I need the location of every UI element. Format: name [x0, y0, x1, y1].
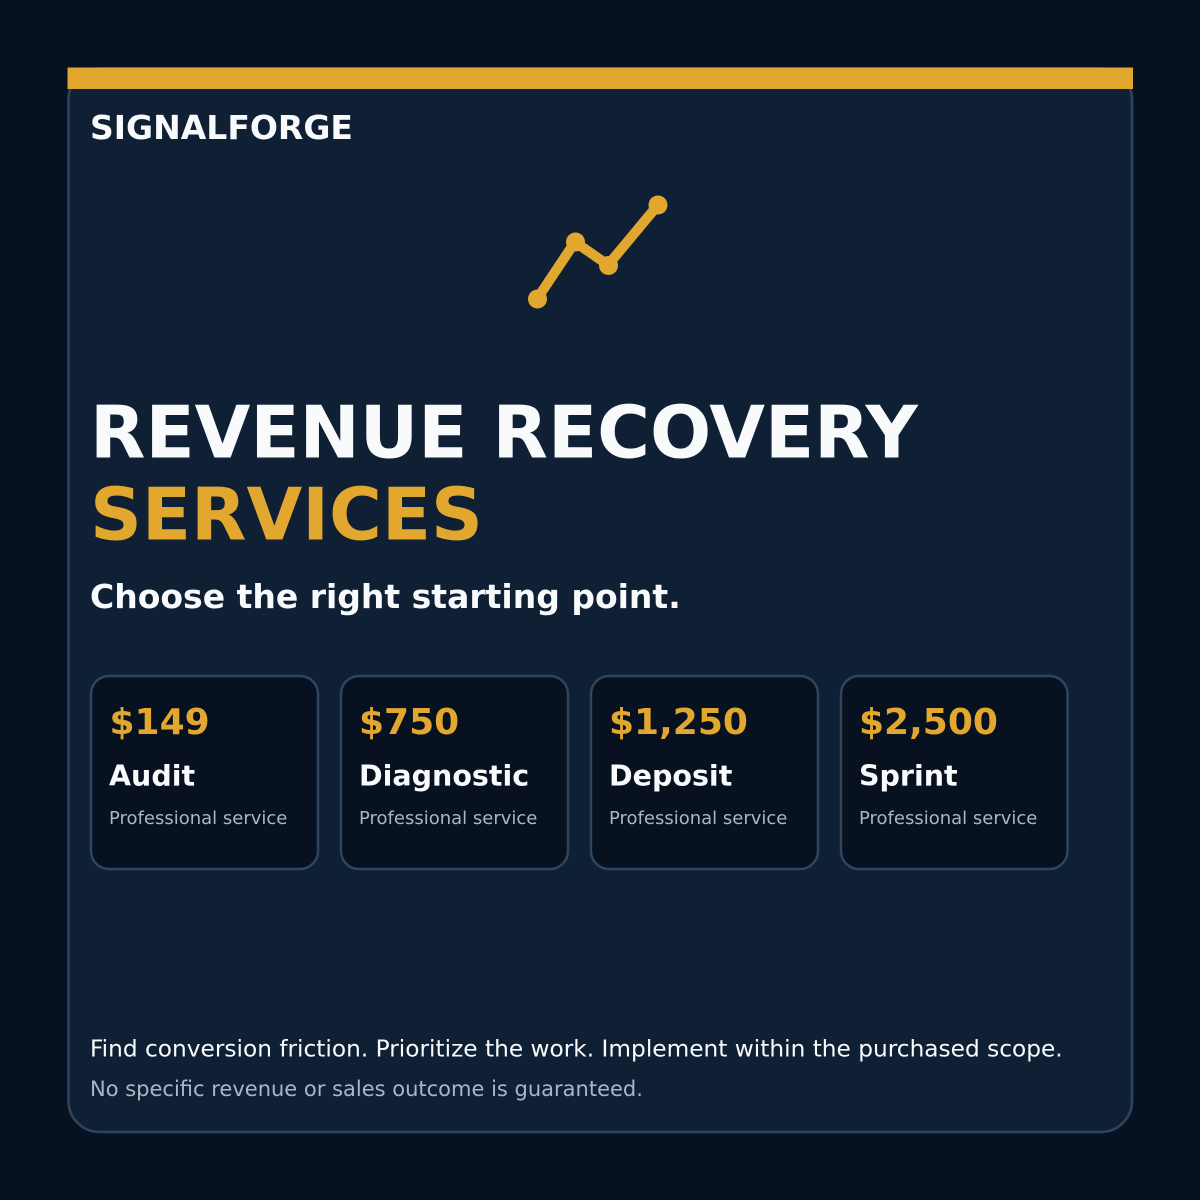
panel: Sprint: $2,500 [859, 702, 998, 743]
panel: Deposit: Deposit [609, 760, 732, 792]
panel: Diagnostic: Professional service [359, 808, 537, 829]
panel: Audit: Professional service [109, 808, 287, 829]
panel: main card [68, 68, 1132, 1132]
panel: Audit [91, 676, 318, 869]
accent bar [68, 68, 1133, 89]
panel: Sprint [841, 676, 1068, 869]
panel: Deposit [591, 676, 818, 869]
panel: Audit: $149 [110, 702, 210, 743]
panel: Sprint: Sprint [859, 760, 958, 792]
title: REVENUE RECOVERY [90, 390, 919, 474]
panel: Deposit: $1,250 [609, 702, 748, 743]
panel: Diagnostic: $750 [359, 702, 459, 743]
panel: Deposit: Professional service [609, 808, 787, 829]
panel: Sprint: Professional service [859, 808, 1037, 829]
subtitle: Choose the right starting point. [90, 577, 681, 616]
title: SERVICES [90, 472, 483, 556]
panel: Diagnostic [341, 676, 568, 869]
brand name: SIGNALFORGE [90, 108, 353, 147]
panel: Audit: Audit [109, 760, 195, 792]
title [90, 390, 919, 556]
disclaimer: No specific revenue or sales outcome is guaranteed. [90, 1077, 643, 1101]
footer statement: Find conversion friction. Prioritize the work. Implement within the purchased scope. [90, 1036, 1063, 1062]
icon: rising line chart [528, 196, 668, 308]
panel: Diagnostic: Diagnostic [359, 760, 529, 792]
